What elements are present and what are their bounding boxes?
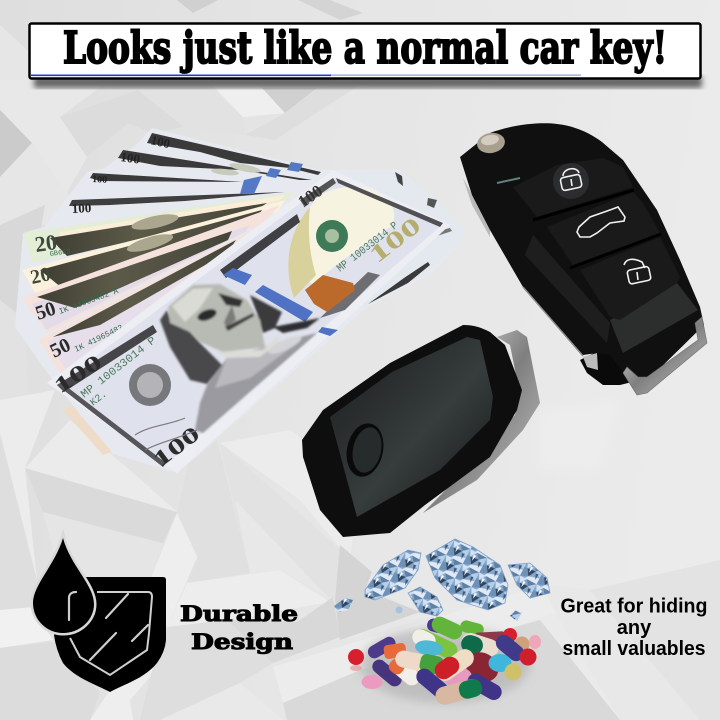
front hundred note: 100 — [365, 213, 426, 269]
front hundred note: MP 10033014 P — [79, 335, 159, 401]
release pin — [475, 131, 507, 155]
callout: great for hiding: Great for hiding — [560, 596, 708, 618]
fifty note 1 — [22, 205, 280, 333]
callout: great for hiding: any — [617, 617, 652, 639]
shadow foot under key — [580, 345, 640, 385]
signatures — [135, 418, 197, 450]
fifty note 2: 50 — [47, 334, 74, 362]
front hundred note: 100 — [294, 181, 326, 211]
heading: Durable Design — [180, 601, 298, 654]
blue ribbon — [223, 268, 338, 336]
hundred notes behind: 100 — [149, 132, 172, 151]
Franklin portrait — [160, 284, 320, 433]
car key: top view with buttons — [460, 123, 707, 395]
back shell — [302, 325, 522, 537]
fifty note 1: 50 — [33, 298, 59, 325]
twenty note 1 — [23, 192, 295, 263]
diamonds — [334, 539, 550, 621]
button: lock — [513, 158, 633, 217]
twenty note 1: GB663 — [49, 248, 71, 259]
key body — [460, 123, 704, 380]
button: unlock — [580, 237, 680, 320]
chrome edge — [423, 330, 540, 513]
front hundred note — [47, 170, 450, 473]
chrome key loop — [623, 317, 707, 395]
hundred notes behind — [69, 132, 321, 216]
fifty note 2: IK 41965482 — [73, 323, 125, 355]
front hundred note: 100 — [49, 349, 106, 398]
printed border bands — [57, 325, 157, 392]
watermark window — [300, 187, 394, 285]
right loose edges of stacked notes — [333, 170, 467, 307]
hundred notes behind: 100 — [71, 200, 92, 216]
heading: Durable Design: Durable — [180, 601, 298, 626]
car key: back view — [302, 325, 540, 537]
stippled lower body — [610, 283, 698, 353]
fifty note 1: IK 41965482 A — [58, 287, 120, 317]
callout: great for hiding — [560, 596, 708, 660]
front hundred note: K2. — [89, 389, 110, 409]
twenty note 1: 20 — [33, 229, 58, 257]
treasury seal — [129, 364, 171, 406]
peach edge under stack — [63, 405, 112, 455]
hundred notes behind: 100 — [92, 174, 107, 186]
twenty note 2 — [22, 200, 285, 293]
icon: water drop and shield — [33, 538, 166, 692]
round button — [342, 420, 388, 480]
button dividers — [533, 190, 661, 268]
title banner — [30, 23, 702, 88]
serial and denomination: MP 10033014 P — [335, 220, 401, 275]
heading: Durable Design: Design — [191, 629, 293, 654]
copper bell — [305, 275, 355, 312]
chrome side edge — [463, 178, 490, 237]
callout: great for hiding: small valuables — [562, 638, 706, 660]
back stack of notes — [15, 128, 467, 473]
pills — [348, 614, 541, 707]
seal green — [316, 220, 348, 252]
banknotes fan — [15, 128, 467, 473]
button: trunk — [547, 192, 660, 265]
front hundred note: 100 — [148, 421, 205, 472]
fifty note 2 — [38, 225, 262, 377]
twenty note 2: 20 — [28, 263, 53, 289]
hundred notes behind: 100 — [120, 149, 141, 167]
